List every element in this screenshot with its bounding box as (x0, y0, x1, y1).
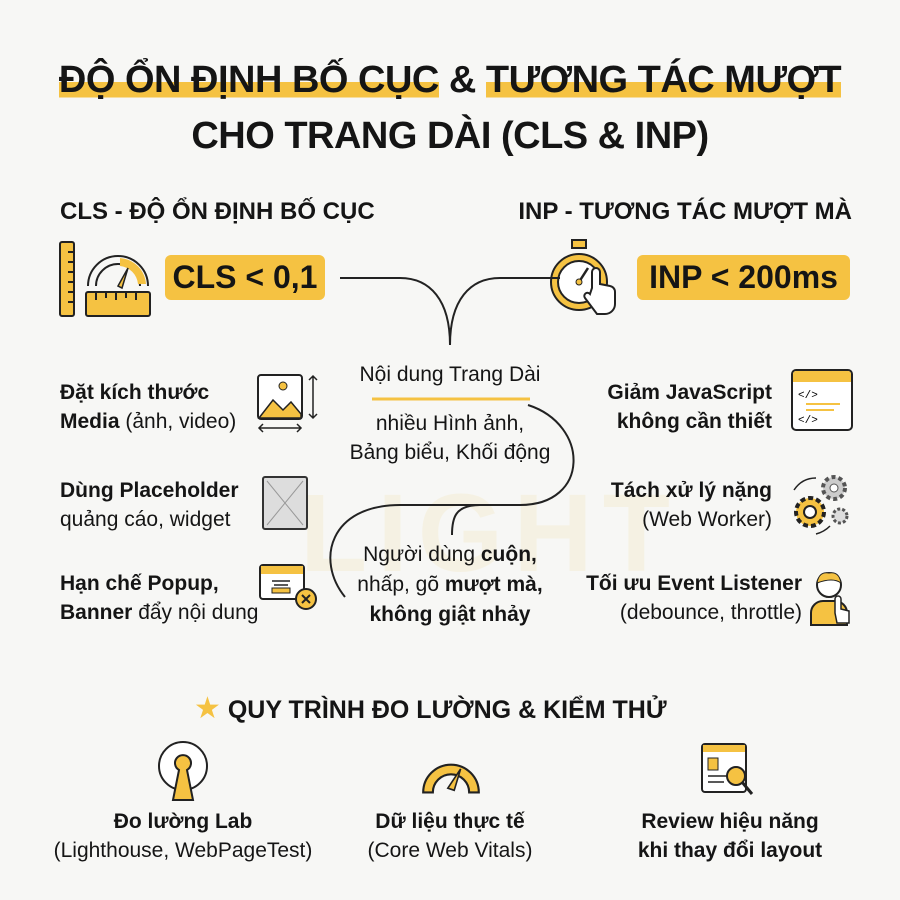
step: review: khi thay đổi layout (638, 839, 822, 862)
step: lab: Đo lường Lab (114, 810, 252, 833)
item: event listener: Tối ưu Event Listener (586, 572, 802, 595)
item: placeholder: Dùng Placeholder (60, 479, 239, 502)
icon: placeholder box (262, 476, 308, 530)
item: web worker: (Web Worker) (642, 508, 772, 531)
icon: popup (259, 564, 317, 610)
center text: user outcome (357, 543, 543, 626)
center text: long page content: Nội dung Trang Dài nhiều Hình ảnh, (360, 363, 540, 435)
item: web worker: Tách xử lý nặng (611, 479, 772, 502)
item: event listener (586, 572, 802, 624)
item: popup (60, 572, 258, 624)
step: review: Review hiệu năng (641, 810, 819, 833)
center text: user outcome: không giật nhảy (369, 603, 530, 626)
item: web worker (611, 479, 772, 531)
icon: gears (793, 475, 848, 535)
icon: gauge (422, 764, 480, 794)
item: popup: Banner đẩy nội dung (60, 601, 258, 624)
title: ĐỘ ỔN ĐỊNH BỐ CỤC & TƯƠNG TÁC MƯỢT (59, 59, 841, 101)
heading: CLS: CLS - ĐỘ ỔN ĐỊNH BỐ CỤC (60, 198, 375, 225)
heading: INP: INP - TƯƠNG TÁC MƯỢT MÀ (518, 198, 852, 225)
center text: user outcome: Người dùng cuộn, (363, 543, 537, 566)
pill: INP: INP < 200ms (649, 259, 838, 295)
item: placeholder (60, 479, 239, 531)
step: review (638, 810, 822, 862)
item: reduce JS (607, 381, 772, 433)
step: field data: (Core Web Vitals) (368, 839, 532, 862)
center text: long page content (350, 363, 550, 464)
watermark: LIGHT (300, 472, 680, 595)
icon: review page (701, 743, 754, 795)
item: media size: Đặt kích thước (60, 381, 209, 404)
item: placeholder: quảng cáo, widget (60, 508, 230, 531)
icon: ruler gauge (59, 241, 151, 317)
icon: lab (158, 741, 208, 801)
icon: person tapping (810, 572, 850, 626)
title (59, 58, 842, 157)
step: lab (54, 810, 312, 862)
center text: long page content: Bảng biểu, Khối động (350, 441, 550, 464)
item: reduce JS: không cần thiết (617, 410, 772, 433)
step: field data: Dữ liệu thực tế (375, 810, 525, 833)
center text: user outcome: nhấp, gõ mượt mà, (357, 573, 543, 596)
item: event listener: (debounce, throttle) (620, 601, 802, 624)
icon: image (257, 374, 318, 432)
heading: measurement process: ★ QUY TRÌNH ĐO LƯỜNG & KIỂM THỬ (194, 692, 667, 725)
pill: CLS: CLS < 0,1 (173, 259, 317, 295)
icon: code window: </> (798, 390, 818, 402)
step: field data (368, 810, 532, 862)
item: media size: Media (ảnh, video) (60, 410, 236, 433)
item: popup: Hạn chế Popup, (60, 572, 219, 595)
title: CHO TRANG DÀI (CLS & INP) (191, 115, 709, 157)
icon: code window: </> (798, 415, 818, 427)
item: reduce JS: Giảm JavaScript (607, 381, 772, 404)
step: lab: (Lighthouse, WebPageTest) (54, 839, 312, 862)
item: media size (60, 381, 236, 433)
icon: code window (791, 369, 853, 431)
icon: stopwatch (550, 239, 616, 315)
